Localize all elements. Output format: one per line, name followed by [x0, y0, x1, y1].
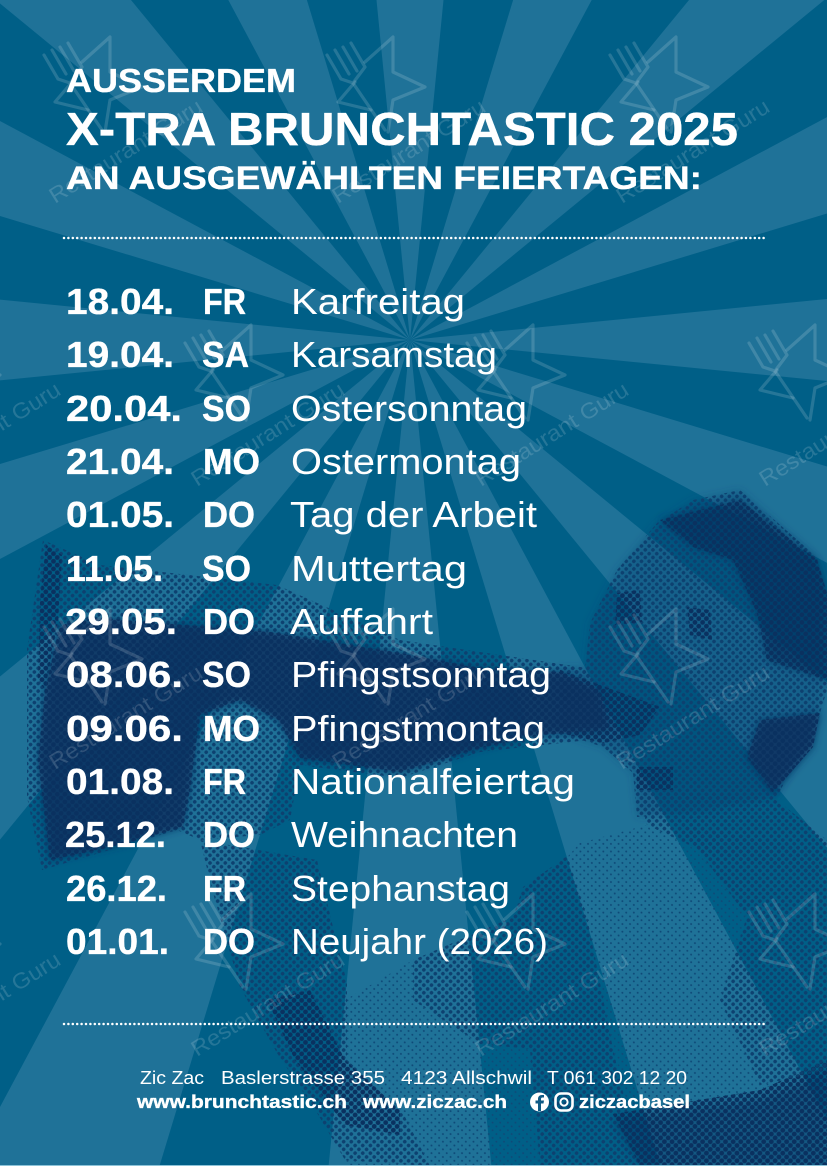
row: Weihnachten: 25.12.: [65, 814, 166, 855]
figure: right eye: [687, 607, 712, 640]
halftone trumpet player: [27, 490, 827, 1166]
row: Ostermontag: 21.04.: [66, 441, 174, 482]
figure: lower right shadow: [613, 1060, 827, 1166]
watermark text: Restaurant Guru: [186, 377, 349, 491]
row: Ostermontag: Ostermontag: [291, 441, 521, 482]
row: Pfingstsonntag: 08.06.: [66, 654, 183, 695]
watermark text: Restaurant Guru: [611, 94, 774, 208]
row: Tag der Arbeit: [66, 494, 537, 535]
figure: sleeve: [413, 856, 640, 1166]
row: Stephanstag: FR: [203, 868, 246, 909]
watermark text: Restaurant Guru: [470, 377, 633, 491]
watermark text: Restaurant Guru: [470, 947, 633, 1061]
watermark text: Restaurant Guru: [186, 947, 349, 1061]
icon: instagram: [556, 1094, 572, 1110]
footer links: [136, 1092, 690, 1112]
row: Tag der Arbeit: 01.05.: [66, 494, 174, 535]
row: Stephanstag: 26.12.: [66, 868, 167, 909]
bottom dotted divider: [64, 1023, 764, 1025]
watermark text: Restaurant Guru: [44, 660, 207, 774]
row: Nationalfeiertag: Nationalfeiertag: [291, 761, 575, 802]
row: Nationalfeiertag: FR: [203, 761, 246, 802]
row: Muttertag: Muttertag: [291, 548, 467, 589]
footer links: www.ziczac.ch: [362, 1092, 507, 1112]
footer links: www.brunchtastic.ch: [136, 1092, 347, 1112]
row: Nationalfeiertag: 01.08.: [66, 761, 174, 802]
figure: arm shadow: [267, 990, 400, 1135]
row: Pfingstsonntag: Pfingstsonntag: [291, 654, 551, 695]
footer links: ziczacbasel: [579, 1092, 690, 1112]
row: Karfreitag: 18.04.: [66, 281, 174, 322]
row: Muttertag: 11.05.: [66, 548, 163, 589]
row: Ostersonntag: [66, 388, 527, 429]
row: Neujahr: [66, 921, 548, 962]
figure: head tone: [560, 490, 827, 817]
figure: horn dark halftone: [38, 618, 610, 860]
row: Weihnachten: DO: [203, 814, 255, 855]
figure: hair: [660, 500, 827, 680]
row: Pfingstmontag: [66, 708, 545, 749]
row: Muttertag: [66, 548, 467, 589]
holiday list: [65, 281, 575, 962]
row: Tag der Arbeit: Tag der Arbeit: [290, 494, 537, 535]
heading: X-TRA BRUNCHTASTIC 2025: [66, 103, 738, 155]
top dotted divider: [64, 237, 764, 239]
row: Neujahr: 01.01.: [66, 921, 169, 962]
heading: AUSSERDEM: [66, 62, 296, 99]
row: Karsamstag: SA: [202, 334, 249, 375]
footer address: [140, 1068, 687, 1088]
bottom edge: [0, 1165, 827, 1166]
figure: horn solid tone: [38, 618, 610, 860]
watermark text: Restaurant Guru: [327, 94, 490, 208]
row: Ostermontag: MO: [203, 441, 260, 482]
row: Auffahrt: 29.05.: [65, 601, 177, 642]
row: Karsamstag: 19.04.: [66, 334, 174, 375]
footer address: 4123 Allschwil: [401, 1068, 532, 1088]
row: Auffahrt: DO: [203, 601, 255, 642]
watermark text: Restaurant Guru: [611, 660, 774, 774]
row: Ostermontag: [66, 441, 521, 482]
row: Karsamstag: [66, 334, 497, 375]
row: Auffahrt: [65, 601, 433, 642]
row: Pfingstsonntag: SO: [202, 654, 251, 695]
footer address: Zic Zac: [140, 1068, 204, 1088]
figure: head halftone: [560, 490, 827, 817]
row: Weihnachten: [65, 814, 518, 855]
figure: lower right shadow tone: [613, 1075, 827, 1166]
figure: arm: [200, 840, 430, 1166]
figure: hair tone: [660, 500, 827, 680]
figure: bell rim: [38, 545, 62, 690]
row: Muttertag: SO: [202, 548, 251, 589]
row: Pfingstmontag: 09.06.: [66, 708, 183, 749]
row: Stephanstag: Stephanstag: [291, 868, 510, 909]
watermark text: Restaurant Guru: [44, 94, 207, 208]
row: Neujahr: Neujahr (2026): [291, 921, 548, 962]
row: Tag der Arbeit: DO: [203, 494, 255, 535]
figure: body sparse dots: [345, 825, 827, 1166]
figure: ear: [747, 713, 820, 793]
row: Pfingstmontag: Pfingstmontag: [291, 708, 545, 749]
figure: neck: [637, 790, 827, 880]
row: Stephanstag: [66, 868, 510, 909]
figure: mouth: [560, 670, 660, 743]
row: Auffahrt: Auffahrt: [290, 601, 433, 642]
row: Ostersonntag: 20.04.: [66, 388, 182, 429]
row: Ostersonntag: SO: [202, 388, 251, 429]
figure: ear tone: [747, 713, 820, 793]
heading: [66, 62, 738, 196]
row: Ostersonntag: Ostersonntag: [291, 388, 527, 429]
footer address: Baslerstrasse 355: [221, 1068, 385, 1088]
row: Karsamstag: Karsamstag: [291, 334, 497, 375]
row: Pfingstmontag: MO: [203, 708, 260, 749]
watermark text: Restaurant Guru: [327, 660, 490, 774]
row: Karfreitag: [66, 281, 465, 322]
figure: right mid shadow: [720, 917, 827, 1085]
figure: horn halo: [27, 540, 607, 870]
heading: AN AUSGEWÄHLTEN FEIERTAGEN:: [66, 160, 702, 196]
row: Weihnachten: Weihnachten: [291, 814, 518, 855]
row: Nationalfeiertag: [66, 761, 575, 802]
figure: left eye: [615, 590, 642, 625]
figure: shoulder tone: [680, 825, 827, 961]
row: Karfreitag: FR: [203, 281, 246, 322]
row: Neujahr: DO: [203, 921, 255, 962]
row: Karfreitag: Karfreitag: [291, 281, 465, 322]
icon: facebook: [530, 1092, 549, 1112]
footer address: T 061 302 12 20: [547, 1068, 687, 1088]
figure: chin: [637, 767, 673, 790]
row: Pfingstsonntag: [66, 654, 551, 695]
